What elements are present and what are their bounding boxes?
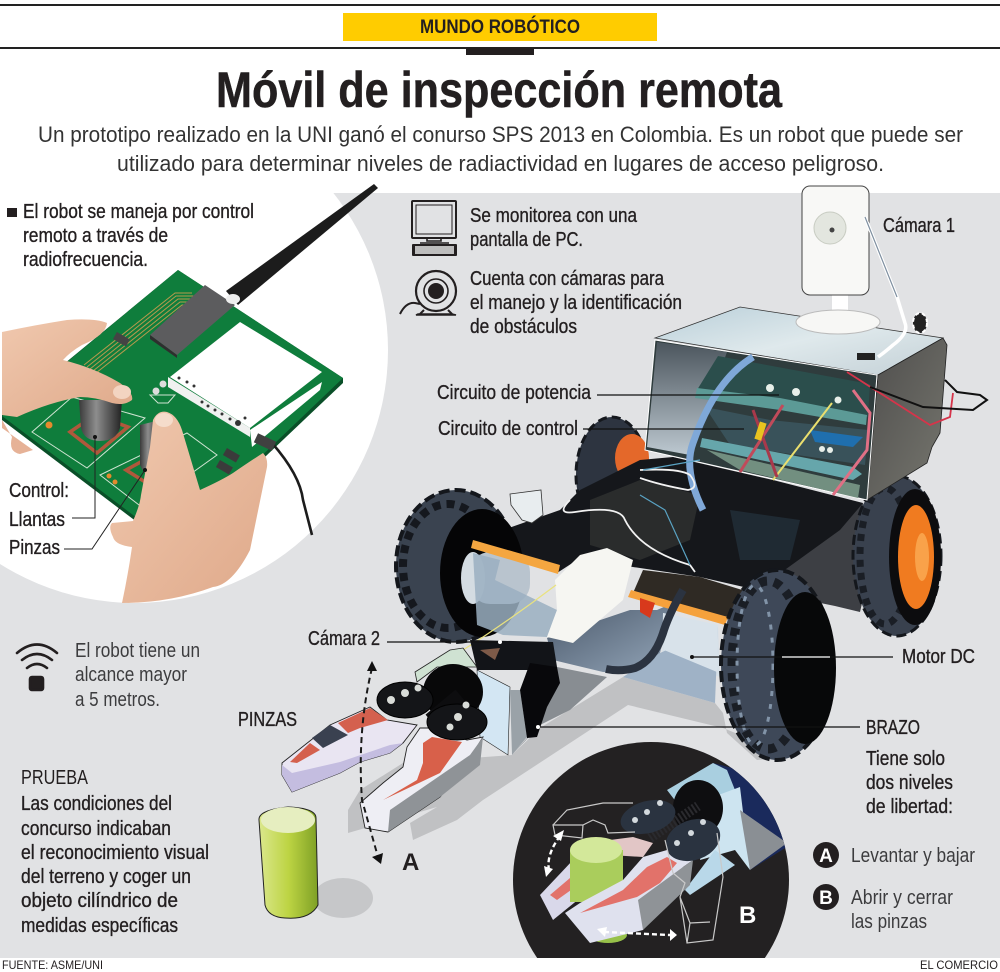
illustration: remote control board and hands bbox=[2, 184, 378, 603]
control labels with leader lines: Llantas bbox=[9, 509, 65, 531]
white gearbox bbox=[547, 548, 633, 643]
label: A: A bbox=[402, 849, 419, 876]
dark assembly bbox=[470, 640, 557, 670]
subtitle: Un prototipo realizado en la UNI ganó el conurso SPS 2013 en Colombia. Es un robot que puede ser bbox=[38, 122, 963, 147]
text: range bbox=[75, 640, 200, 711]
front claw bbox=[565, 850, 693, 943]
footer: source: FUENTE: ASME/UNI bbox=[2, 958, 103, 972]
back claw bbox=[540, 863, 576, 920]
text: prueba: concurso indicaban bbox=[21, 818, 171, 840]
title: Móvil de inspección remota bbox=[216, 62, 783, 118]
header band bbox=[0, 4, 1000, 55]
electronics box: interior bbox=[645, 340, 877, 500]
callout: radio control: radiofrecuencia. bbox=[23, 249, 148, 271]
text: range: a 5 metros. bbox=[75, 689, 160, 711]
label: pinzas: PINZAS bbox=[238, 709, 297, 731]
cable bbox=[272, 443, 312, 535]
key B: las pinzas bbox=[851, 911, 927, 933]
label: motor DC bbox=[690, 646, 975, 668]
left hand bbox=[2, 319, 132, 417]
white top components bbox=[766, 384, 842, 453]
text: monitor bbox=[470, 205, 638, 251]
knob: llantas bbox=[79, 400, 122, 441]
text: cameras: Cuenta con cámaras para bbox=[470, 268, 665, 290]
label: circuito de control: Circuito de control bbox=[438, 418, 578, 440]
camera 1 bbox=[796, 186, 927, 360]
left bracket bbox=[473, 553, 557, 637]
text: arm freedom: dos niveles bbox=[866, 772, 953, 794]
detail lens: gripper: B bbox=[739, 902, 756, 929]
control labels with leader lines: Pinzas bbox=[9, 537, 60, 559]
black disc bbox=[423, 664, 483, 720]
label: camara 2: Cámara 2 bbox=[308, 628, 380, 650]
gears bbox=[673, 780, 723, 826]
key A: Levantar y bajar bbox=[851, 845, 975, 867]
gripper arm bbox=[282, 640, 607, 832]
gold traces bbox=[84, 293, 200, 373]
light blocks bbox=[667, 763, 734, 800]
text: prueba: del terreno y coger un bbox=[21, 866, 191, 888]
gray side bbox=[512, 667, 607, 755]
header band: MUNDO ROBÓTICO bbox=[420, 16, 580, 38]
gear discs bbox=[377, 682, 433, 718]
label: motor DC: Motor DC bbox=[902, 646, 975, 668]
icon: wifi bbox=[17, 644, 57, 690]
test cylinder bbox=[259, 807, 373, 918]
label: camara 2 bbox=[308, 628, 502, 650]
label: brazo bbox=[536, 717, 920, 739]
upper claw bbox=[282, 707, 417, 792]
dashed arrow: movement A bbox=[361, 661, 383, 864]
key B: B bbox=[819, 888, 833, 909]
subtitle: utilizado para determinar niveles de radiactividad en lugares de acceso peligroso. bbox=[117, 151, 884, 176]
label: camara 1: Cámara 1 bbox=[883, 215, 955, 237]
key A bbox=[813, 842, 975, 868]
callout: radio control: remoto a través de bbox=[23, 225, 168, 247]
black deck bbox=[473, 457, 863, 590]
dark blue bbox=[713, 763, 790, 870]
text: prueba: Las condiciones del bbox=[21, 793, 172, 815]
circuit board bbox=[2, 270, 343, 522]
motor DC bbox=[662, 613, 720, 677]
text: arm freedom: Tiene solo bbox=[866, 748, 945, 770]
key B bbox=[813, 884, 953, 933]
white bracket behind front wheel bbox=[510, 490, 543, 523]
control labels with leader lines: Control: bbox=[9, 480, 69, 502]
center metal plate bbox=[547, 603, 673, 673]
black cable bbox=[606, 590, 683, 670]
tan block bbox=[415, 648, 477, 682]
lower claw bbox=[360, 728, 483, 832]
electronics box: side bbox=[867, 338, 947, 500]
control pads bbox=[32, 395, 217, 508]
green cylinder bbox=[570, 850, 623, 902]
wires bbox=[564, 357, 987, 572]
detail lens: gripper bbox=[513, 742, 790, 972]
text: arm freedom bbox=[866, 748, 953, 818]
orange strips bbox=[471, 540, 560, 574]
key A: A bbox=[819, 846, 833, 867]
key B: Abrir y cerrar bbox=[851, 887, 953, 909]
callout: radio control: El robot se maneja por control bbox=[23, 201, 254, 223]
yellow wire bbox=[463, 585, 556, 650]
icon: PC monitor bbox=[412, 201, 457, 256]
left motor bbox=[461, 552, 530, 604]
chassis right side plate bbox=[757, 503, 872, 612]
text: range: alcance mayor bbox=[75, 664, 187, 686]
right hand bbox=[110, 412, 267, 603]
callout: radio control bbox=[7, 201, 254, 271]
circuit boards bbox=[697, 356, 870, 417]
robot photo bbox=[282, 186, 987, 832]
label: circuito de potencia: Circuito de potencia bbox=[437, 382, 592, 404]
text: cameras bbox=[470, 268, 682, 338]
control labels with leader lines bbox=[9, 435, 147, 559]
white display card bbox=[170, 322, 322, 428]
black blob bbox=[520, 663, 560, 738]
text: prueba: PRUEBA bbox=[21, 767, 89, 789]
rear right wheel bbox=[853, 476, 941, 636]
text: prueba bbox=[21, 767, 209, 937]
text: monitor: pantalla de PC. bbox=[470, 229, 583, 251]
icon: webcam bbox=[400, 271, 456, 315]
text: prueba: medidas específicas bbox=[21, 915, 178, 937]
text: range: El robot tiene un bbox=[75, 640, 200, 662]
front left wheel bbox=[396, 490, 524, 642]
antenna bbox=[226, 184, 378, 305]
robot shadow bbox=[348, 677, 795, 840]
background panel bbox=[0, 193, 1000, 958]
label: brazo: BRAZO bbox=[866, 717, 920, 739]
text: prueba: el reconocimiento visual bbox=[21, 842, 209, 864]
text: cameras: el manejo y la identificación bbox=[470, 292, 682, 314]
rear plate bbox=[633, 570, 752, 620]
text: monitor: Se monitorea con una bbox=[470, 205, 638, 227]
front right wheel bbox=[721, 570, 836, 760]
white circle: control panel backdrop bbox=[0, 193, 388, 603]
ghost outlines bbox=[553, 803, 723, 943]
worm gear bbox=[430, 695, 460, 720]
text: prueba: objeto cilíndrico de bbox=[21, 890, 178, 912]
text: arm freedom: de libertad: bbox=[866, 796, 953, 818]
text: cameras: de obstáculos bbox=[470, 316, 577, 338]
rear left wheel bbox=[576, 417, 649, 533]
dashed arrows bbox=[548, 836, 670, 935]
electronics box: top bbox=[655, 307, 943, 375]
subtitle bbox=[38, 122, 963, 176]
radio module bbox=[150, 285, 235, 355]
light block bbox=[477, 670, 510, 755]
knob: pinzas bbox=[140, 420, 160, 476]
